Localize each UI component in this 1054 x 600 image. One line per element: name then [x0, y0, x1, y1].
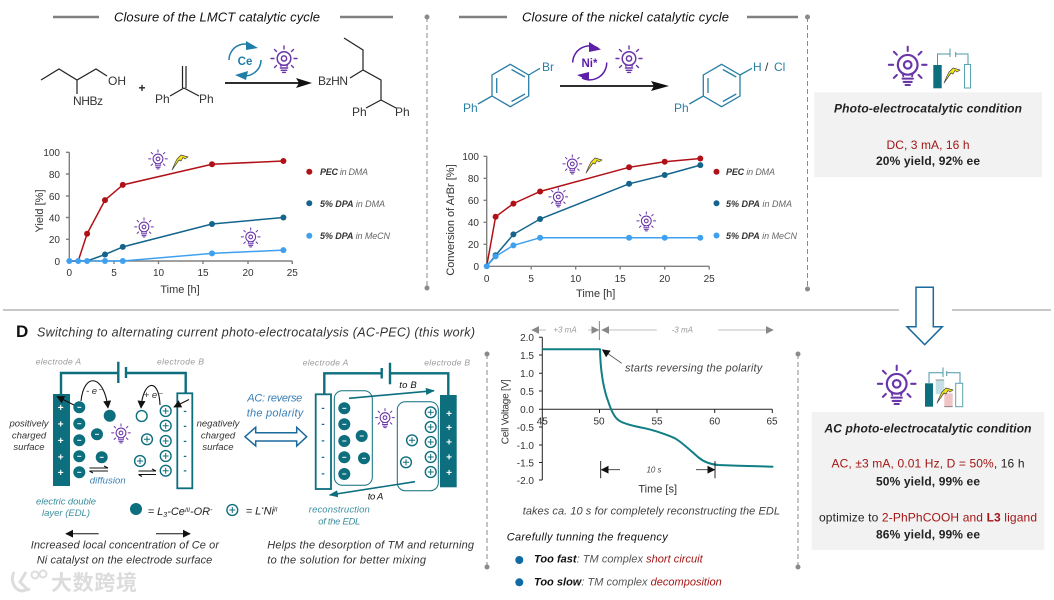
- icon: bolt on PEC curve: [586, 158, 602, 173]
- caption: 10 s reconstruction: takes ca. 10 s for completely reconstructing the EDL: [523, 505, 780, 517]
- axes: 100: [462, 152, 479, 163]
- axes: -2.0: [517, 476, 534, 487]
- label: positively charged surface: surface: [13, 442, 45, 453]
- label: diffusion: diffusion: [90, 475, 126, 486]
- icon: light bulb: [616, 46, 642, 72]
- text block: frequency tuning: [507, 532, 722, 589]
- axes: 0.0: [520, 405, 534, 416]
- heading: D section: Switching to alternating current photo-electrocatalysis (AC-PEC) (this work): [37, 326, 475, 340]
- positive complexes: [401, 407, 436, 477]
- reactant: amino alcohol: [41, 69, 126, 108]
- panel: AC condition: AC photo-electrocatalytic condition: [824, 421, 1032, 435]
- series: 5% DPA in DMA: [69, 214, 286, 261]
- label: AC reverse the polarity: the polarity: [247, 408, 305, 420]
- electrode labels: [303, 358, 470, 368]
- series: PEC in DMA: [69, 158, 286, 261]
- electrode A positive: +: [58, 468, 64, 479]
- electrode labels: electrode A: [36, 356, 81, 366]
- axes: 0.5: [520, 387, 534, 398]
- axes: -1.5: [517, 458, 534, 470]
- reactant: 4-bromobiphenyl: Br: [542, 60, 554, 74]
- axes: 15: [197, 268, 209, 279]
- electrode B negative: -: [183, 406, 187, 417]
- reactant: 4-bromobiphenyl: [463, 60, 554, 115]
- caption: local concentration: Ni catalyst on the electrode surface: [37, 554, 212, 566]
- legend: [714, 167, 798, 241]
- icon: Ni catalytic cycle: [573, 42, 607, 81]
- battery circuit: [61, 362, 186, 394]
- legend: 5% DPA in MeCN: [726, 231, 798, 241]
- icon: bulb on PEC curve: [149, 150, 167, 169]
- heading: nickel cycle: Closure of the nickel catalytic cycle: [522, 10, 729, 24]
- arrow: to B: [349, 380, 434, 398]
- icon: bulb on MeCN curve: [637, 212, 656, 231]
- axes: 1.5: [520, 351, 534, 362]
- electrode A positive: +: [58, 436, 64, 447]
- negative complexes: [338, 402, 370, 480]
- electrode B positive: +: [446, 438, 452, 448]
- axes: 25: [704, 274, 715, 285]
- text block: frequency tuning: Too slow: TM complex decomposition: [534, 577, 722, 589]
- line chart: yield vs time: [34, 148, 390, 296]
- axes: 50: [593, 416, 605, 427]
- panel: AC condition: 50% yield, 99% ee: [876, 475, 980, 489]
- label: negatively charged surface: charged: [201, 430, 236, 442]
- arrow: to B: to B: [399, 380, 417, 391]
- current annotations: [532, 321, 773, 340]
- diagram: electric double layer: [8, 356, 241, 519]
- axes: 80: [49, 170, 60, 181]
- axes: 2.0: [520, 333, 534, 344]
- label: AC reverse the polarity: [246, 393, 305, 420]
- icon: light bulb: [376, 409, 394, 428]
- product: biphenyl: /: [765, 60, 769, 74]
- icon: light bulb: [112, 424, 130, 443]
- electrode A positive: +: [58, 452, 64, 464]
- label: electric double layer: [36, 496, 96, 519]
- electron labels: - e⁻: [86, 386, 103, 397]
- reactant: amino alcohol: NHBz: [73, 94, 103, 108]
- reaction scheme: LMCT: [41, 38, 410, 119]
- axes: -1.0: [517, 441, 534, 452]
- axes: 40: [468, 218, 479, 229]
- product: biphenyl: [674, 60, 785, 115]
- electrode A negative: -: [321, 452, 325, 463]
- axes: [500, 333, 778, 496]
- reaction scheme: nickel: [463, 42, 785, 115]
- axes: [445, 152, 715, 300]
- arrow: to A: to A: [368, 491, 383, 502]
- annotation: 10 s: 10 s: [646, 466, 662, 475]
- watermark: 大数跨境: [51, 572, 137, 595]
- legend: [306, 167, 390, 241]
- annotation: starts reversing: [602, 350, 764, 375]
- text block: frequency tuning: Too fast: TM complex short circuit: [534, 554, 704, 566]
- panel: DC condition: Photo-electrocatalytic condition: [834, 101, 1022, 115]
- axes: 20: [659, 274, 671, 285]
- legend: complexes: -: [210, 507, 213, 514]
- electrode A negative: -: [321, 468, 325, 480]
- legend: complexes: = L: [246, 506, 261, 518]
- axes: Time [h]: [576, 288, 615, 300]
- series: 5% DPA in MeCN: [484, 235, 703, 269]
- text block: frequency tuning: Carefully tunning the frequency: [507, 532, 669, 544]
- electron labels: + e⁻: [144, 390, 163, 401]
- axes: 20: [242, 268, 254, 279]
- electrode labels: [36, 356, 204, 366]
- axes: 10: [153, 268, 164, 279]
- product: BzHN: [318, 74, 348, 88]
- axes: 60: [468, 196, 479, 207]
- axes: Yield [%]: [34, 189, 46, 233]
- electron labels: [86, 386, 163, 401]
- series: 5% DPA in DMA: [487, 162, 703, 266]
- label: positively charged surface: positively: [8, 419, 50, 430]
- icon: photo-electro setup (AC): [878, 366, 963, 407]
- electrode B positive: +: [446, 468, 452, 479]
- axes: 60: [49, 192, 60, 203]
- icon: Ce catalytic cycle: Ce: [238, 56, 252, 68]
- axes: 45: [537, 416, 548, 427]
- panel: AC condition: 86% yield, 99% ee: [876, 527, 980, 541]
- icon: photo-electro setup (DC): [889, 47, 970, 88]
- current annotations: +3 mA: [553, 326, 577, 335]
- heading: D section: D: [16, 322, 28, 341]
- axes: 0: [473, 262, 479, 273]
- caption: desorption: to the solution for better mixing: [267, 554, 427, 566]
- axes: 40: [49, 214, 60, 224]
- axes: 5: [111, 268, 117, 279]
- panel: AC condition: AC, ±3 mA, 0.01 Hz, D = 50%, 16 h: [832, 457, 1024, 471]
- legend: complexes: III: [185, 508, 190, 514]
- axes: 0: [484, 274, 490, 285]
- electrode A positive: +: [58, 403, 64, 414]
- axes: -0.5: [517, 423, 534, 434]
- legend: complexes: [130, 503, 278, 519]
- plus sign: +: [138, 81, 146, 95]
- reactant: 1,1-diphenylethylene: Ph: [199, 92, 214, 106]
- product: Ph: [352, 105, 367, 119]
- icon: light bulb: [271, 46, 297, 72]
- electrode B negative: -: [183, 436, 187, 447]
- reactant: amino alcohol: OH: [108, 74, 126, 88]
- label: negatively charged surface: [197, 419, 241, 453]
- annotation: 10 s: [601, 461, 715, 478]
- reaction arrow: [225, 78, 312, 88]
- negative complexes: [73, 401, 116, 478]
- axes: Conversion of ArBr [%]: [445, 164, 457, 276]
- product: biphenyl: Cl: [774, 60, 785, 74]
- label: positively charged surface: [8, 419, 50, 453]
- axes: 60: [709, 416, 721, 427]
- legend: PEC in DMA: [320, 167, 368, 177]
- axes: Cell Voltage [V]: [500, 379, 512, 444]
- electrode B negative: -: [183, 421, 187, 432]
- reactant: 1,1-diphenylethylene: [155, 66, 214, 106]
- electrode labels: electrode B: [424, 358, 470, 368]
- label: reconstruction of the EDL: of the EDL: [318, 516, 360, 527]
- line chart: cell voltage vs time: [500, 321, 778, 496]
- diagram: reversed polarity: [303, 358, 470, 527]
- icon: bulb on DMA curve: [549, 188, 568, 207]
- product: biphenyl: Ph: [674, 101, 689, 115]
- axes: 65: [766, 416, 778, 427]
- line chart: conversion vs time: [445, 152, 798, 300]
- caption: local concentration: [31, 534, 220, 566]
- electron transfer arrows: [57, 381, 189, 476]
- legend: complexes: -OR: [190, 506, 210, 518]
- legend: complexes: 3: [163, 512, 167, 519]
- axes: 20: [468, 240, 479, 251]
- legend: PEC in DMA: [726, 167, 775, 177]
- battery circuit: [324, 363, 448, 395]
- axes: [34, 148, 298, 296]
- caption: desorption: Helps the desorption of TM and returning: [267, 539, 475, 551]
- axes: 0: [54, 257, 60, 268]
- electrode labels: electrode A: [303, 358, 349, 368]
- axes: 10: [570, 274, 582, 285]
- icon: bulb on PEC curve: [563, 155, 582, 174]
- legend: 5% DPA in MeCN: [320, 231, 390, 241]
- electrode B negative: [177, 393, 192, 488]
- reactant: 4-bromobiphenyl: Ph: [463, 101, 478, 115]
- legend: complexes: = L: [148, 506, 163, 518]
- axes: 80: [468, 174, 479, 185]
- axes: 20: [49, 235, 60, 246]
- axes: 100: [43, 148, 60, 159]
- series: PEC in DMA: [487, 156, 703, 266]
- axes: 0: [67, 268, 73, 279]
- icon: bulb on MeCN curve: [241, 228, 260, 247]
- positive complexes: [135, 406, 171, 476]
- electrode labels: electrode B: [157, 356, 204, 366]
- icon: Ni catalytic cycle: Ni*: [582, 58, 598, 70]
- label: electric double layer: electric double: [36, 496, 96, 507]
- arrow: down to AC condition: [907, 287, 942, 345]
- electrode A negative: -: [321, 403, 325, 414]
- icon: bolt on PEC curve: [172, 155, 188, 170]
- axes: 1.0: [520, 369, 534, 380]
- annotation: starts reversing: starts reversing the polarity: [625, 363, 764, 375]
- electrode A negative: -: [321, 436, 325, 446]
- axes: Time [s]: [638, 484, 677, 496]
- legend: 5% DPA in DMA: [320, 199, 385, 209]
- reactant: 1,1-diphenylethylene: Ph: [155, 92, 170, 106]
- product: Ph: [395, 105, 410, 119]
- axes: Time [h]: [160, 284, 200, 296]
- current annotations: -3 mA: [672, 326, 693, 335]
- voltage curve: [542, 349, 773, 467]
- reaction arrow: [560, 81, 669, 91]
- axes: 15: [615, 274, 626, 285]
- legend: complexes: II: [274, 508, 278, 514]
- product: [318, 38, 410, 119]
- electrode A positive: [53, 394, 70, 486]
- arrow: to A: [330, 482, 415, 502]
- panel: DC condition: DC, 3 mA, 16 h: [886, 138, 970, 152]
- watermark: [12, 570, 137, 595]
- label: AC reverse the polarity: AC: reverse: [246, 393, 302, 405]
- label: negatively charged surface: negatively: [197, 419, 241, 430]
- icon: Ce catalytic cycle: [229, 41, 261, 80]
- label: positively charged surface: charged: [12, 430, 47, 442]
- electrode B positive: +: [446, 409, 452, 420]
- electrode B negative: -: [183, 451, 187, 462]
- electrode A negative: -: [321, 419, 325, 430]
- electrode B positive: +: [446, 423, 452, 434]
- panel: AC condition: optimize to 2-PhPhCOOH and L3 ligand: [819, 511, 1037, 525]
- panel: DC condition: 20% yield, 92% ee: [876, 154, 980, 168]
- electrode B positive: +: [446, 452, 452, 464]
- electrode A positive: +: [58, 420, 64, 430]
- caption: desorption: [267, 539, 475, 566]
- label: reconstruction of the EDL: [309, 504, 370, 527]
- rounded region: positive: [397, 402, 438, 491]
- label: reconstruction of the EDL: reconstruction: [309, 504, 370, 515]
- series: 5% DPA in MeCN: [66, 247, 286, 264]
- electrode B negative: -: [183, 466, 187, 476]
- legend: complexes: Ni: [264, 506, 275, 518]
- label: electric double layer: layer (EDL): [42, 508, 90, 519]
- product: biphenyl: H: [753, 60, 762, 74]
- electrode B positive: [440, 395, 457, 487]
- label: negatively charged surface: surface: [202, 442, 234, 453]
- panel: DC condition: [814, 92, 1042, 177]
- rounded region: negative: [334, 391, 372, 485]
- legend: complexes: -Ce: [167, 506, 185, 518]
- axes: 55: [651, 416, 663, 427]
- panel: AC condition: [812, 412, 1044, 550]
- legend: complexes: *: [261, 508, 264, 514]
- heading: LMCT cycle: Closure of the LMCT catalytic cycle: [114, 10, 320, 24]
- axes: 25: [287, 268, 298, 279]
- axes: 5: [528, 274, 534, 285]
- legend: 5% DPA in DMA: [726, 199, 792, 209]
- caption: local concentration: Increased local concentration of Ce or: [31, 539, 220, 551]
- electrode A negative: [316, 394, 331, 489]
- arrow: double-headed polarity: [245, 427, 307, 446]
- icon: bulb on DMA curve: [135, 218, 153, 237]
